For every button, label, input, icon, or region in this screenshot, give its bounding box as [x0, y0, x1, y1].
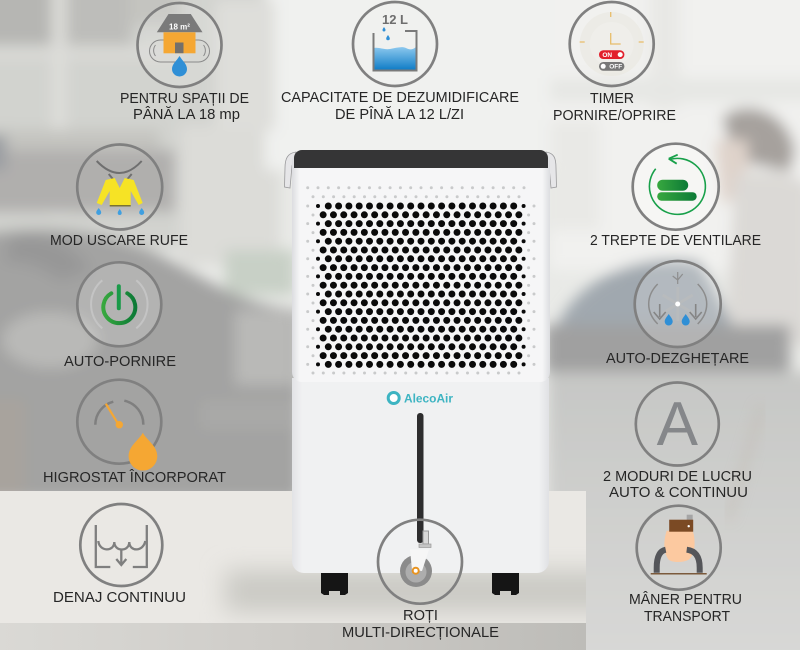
circle: [570, 2, 654, 86]
letter A icon: A: [657, 390, 699, 459]
label: 2 TREPTE DE VENTILARE: [590, 232, 761, 249]
circle: [378, 520, 462, 604]
clock icon: [580, 12, 644, 76]
sofa: [0, 229, 300, 500]
small black holes: [318, 206, 524, 366]
label: HIGROSTAT ÎNCORPORAT: [43, 469, 226, 486]
lower tank: [292, 378, 549, 573]
feature: auto defrost: [606, 261, 749, 367]
AlecoAir logo: AlecoAir: [404, 392, 453, 406]
hand icon: [651, 515, 707, 574]
label: MÂNER PENTRU: [629, 591, 742, 608]
feature: two fan speeds: [590, 144, 761, 249]
circle: [633, 144, 719, 230]
large black holes: [323, 206, 519, 364]
power icon: [91, 280, 148, 328]
house icon: 18 m²: [169, 22, 190, 32]
upper body: [292, 150, 550, 382]
feature: laundry mode: [50, 144, 188, 249]
feature: room size: PÂNĂ LA 18 mp: [133, 106, 240, 123]
label: AUTO-DEZGHEȚARE: [606, 350, 749, 367]
circle: [138, 3, 222, 87]
circle: [77, 144, 162, 230]
blurred leg on floor: [728, 405, 762, 520]
handles: [284, 152, 556, 188]
shelves: [0, 0, 280, 250]
circle: [635, 261, 721, 347]
black control panel: [294, 150, 548, 168]
feature: capacity: DE PÎNĂ LA 12 L/ZI: [335, 106, 464, 123]
table top: [0, 491, 586, 623]
feature: hygrostat: [43, 380, 226, 486]
defrost icon: [649, 272, 707, 326]
label: TIMER: [590, 90, 634, 107]
label: CAPACITATE DE DEZUMIDIFICARE: [281, 89, 519, 106]
floor: [548, 372, 800, 650]
feature: continuous drain: [53, 504, 186, 606]
tank icon: [374, 12, 416, 70]
air grille: [308, 188, 534, 373]
wheel icon: [400, 531, 432, 587]
circle: [80, 504, 162, 586]
label: MOD USCARE RUFE: [50, 232, 188, 249]
label: PENTRU SPAȚII DE: [120, 90, 249, 107]
table front edge: [0, 623, 586, 650]
circle: [77, 262, 161, 346]
shirt icon: [96, 161, 144, 215]
dehumidifier product: [284, 150, 556, 595]
feature: multi-directional wheels: MULTI-DIRECȚIONALE: [342, 624, 499, 641]
device shadow on table: [225, 570, 625, 612]
person: [722, 108, 795, 172]
light perforations: [308, 188, 534, 373]
tank slot: [417, 413, 424, 543]
off switch: OFF: [609, 64, 622, 71]
circle: [637, 506, 721, 590]
label: AUTO-PORNIRE: [64, 353, 176, 370]
side perforations: [308, 206, 534, 366]
feature: two work modes: AUTO & CONTINUU: [609, 484, 748, 501]
feature: carrying handle: [629, 506, 742, 625]
window and wall behind person: [550, 0, 800, 270]
label: DENAJ CONTINUU: [53, 589, 186, 606]
feature: auto start: [64, 262, 176, 370]
label: ROȚI: [403, 607, 438, 624]
feature: timer: [553, 2, 676, 124]
feature: capacity: [281, 2, 519, 123]
circle: [636, 382, 719, 466]
feature: timer: PORNIRE/OPRIRE: [553, 107, 676, 124]
drain icon: [96, 525, 147, 567]
gauge and drop icon: [95, 401, 157, 471]
feature: carrying handle: TRANSPORT: [644, 608, 730, 625]
feet: [321, 572, 519, 595]
fan speed icon: [649, 155, 705, 214]
label: 2 MODURI DE LUCRU: [603, 468, 752, 485]
on switch: ON: [602, 52, 612, 59]
feature: two work modes: [603, 382, 752, 501]
feature: multi-directional wheels: [342, 520, 499, 641]
circle: [77, 380, 161, 464]
circle: [353, 2, 437, 86]
tank icon: 12 L: [382, 12, 408, 27]
feature: room size: [120, 3, 249, 123]
